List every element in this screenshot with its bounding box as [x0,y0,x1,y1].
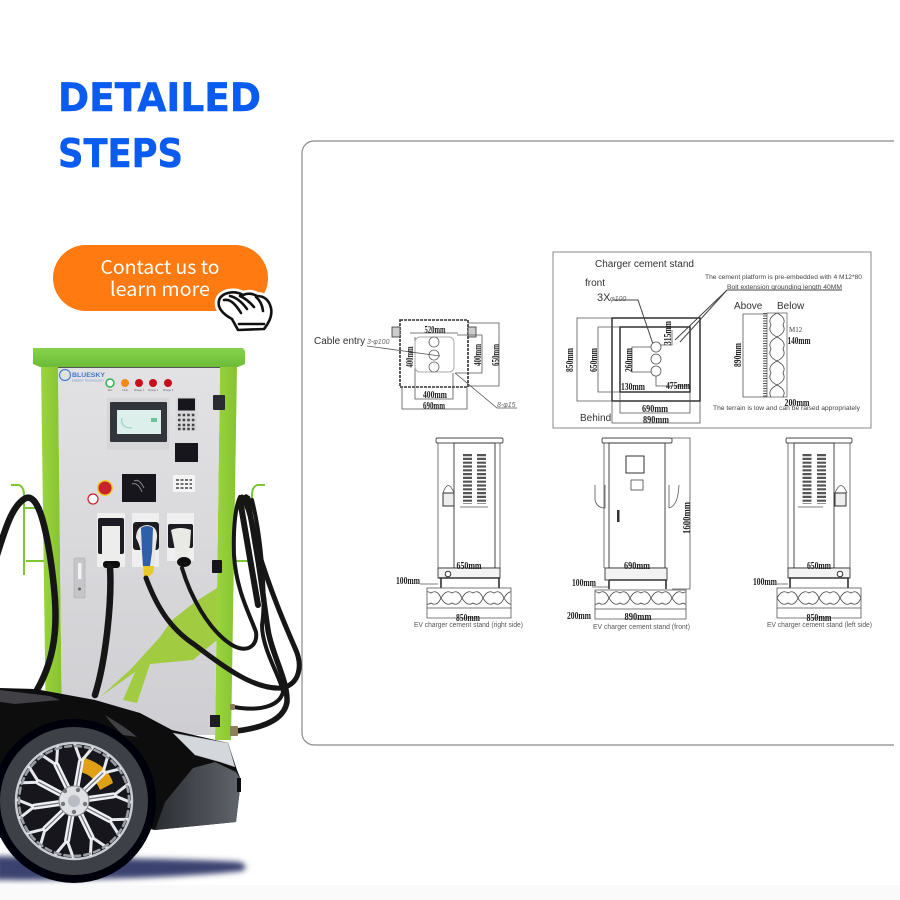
drawing: charger cement stand plan: 130mm [621,381,645,393]
indicator lights: Charge 2 [148,389,159,392]
drawing: front elevation [567,438,693,631]
keypad [176,397,197,431]
card reader [175,443,198,462]
drawing: charger cement stand plan [553,252,871,428]
car shadow [0,856,246,880]
panel: installation drawings card [302,141,894,745]
hub [59,786,89,816]
wheel arch [0,719,156,883]
hood highlight [0,690,137,737]
title: DETAILED [58,76,261,121]
warning sign [88,494,98,504]
RFID reader [122,474,156,502]
indicator lights: Charge 3 [163,389,174,392]
front bumper [155,762,241,830]
logo: BLUESKY [72,372,106,379]
drawing: cable entry plan: 8-φ15 [497,402,516,409]
charging cables [0,497,299,731]
connector recesses [97,513,194,567]
QR sticker [173,475,195,492]
emergency stop button [97,480,113,496]
drawing: charger cement stand plan: front [585,278,605,289]
drawing: cable entry plan [314,320,517,412]
drawing: cable entry plan: 520mm [424,324,446,336]
lock lower [210,715,220,727]
contact button: learn more [110,275,210,302]
title: STEPS [58,132,183,177]
drawing: cable entry plan: 400mm [423,389,447,401]
drawing: right side elevation: 850mm [456,612,480,624]
grille notch [237,778,241,792]
drawing: stand cross-section: 140mm [788,335,810,347]
logo [60,370,106,382]
drawing: charger cement stand plan: 850mm [564,348,576,372]
drawing: charger cement stand plan: 475mm [666,380,690,392]
drawing: cable entry plan: 690mm [423,400,445,412]
drawing: right side elevation: EV charger cement stand (right side) [414,622,523,629]
drawing: right side elevation: 100mm [396,575,420,587]
brake caliper [80,757,113,790]
green swoosh graphic [100,588,217,703]
drawing: right side elevation: 650mm [456,560,482,572]
drawing: charger cement stand plan: 260mm [623,348,635,372]
connector 2 [133,522,159,577]
drawing: stand cross-section: 890mm [732,343,744,367]
lock bottom [212,560,222,573]
drawing: cable entry plan: 400mm [404,346,416,368]
drawing: right side elevation [396,438,523,629]
drawing: charger cement stand plan: 690mm [642,403,668,415]
headlight [173,733,235,767]
indicator lights [106,379,174,392]
drawing: front elevation: EV charger cement stand (front) [593,624,690,631]
indicator lights: Fault [122,389,128,392]
drawing: front elevation: 890mm [624,611,652,623]
contact button: Contact us to [100,253,220,280]
drawing: charger cement stand plan: 650mm [588,348,600,372]
drawing: cable entry plan: 3-φ100 [367,339,390,346]
icon: pointing hand [219,292,271,330]
drawing: left side elevation [753,438,872,629]
logo: ENERGY TECHNOLOGY [72,378,104,382]
indicator lights: Run [108,389,113,392]
car body [0,688,241,838]
drawing: left side elevation: 100mm [753,576,777,588]
cable fittings [230,704,238,736]
illustration: EV charging station [0,348,299,740]
drawing: charger cement stand plan: Behind [580,413,611,424]
drawing: cable entry plan: 650mm [490,344,502,366]
spokes [18,745,130,857]
side handle [74,558,85,598]
drawing: stand cross-section [713,301,861,412]
connector 3 [168,524,193,567]
drawing: stand cross-section: Below [777,301,805,312]
drawing: stand cross-section: 200mm [784,397,810,409]
charger body [33,348,245,740]
charger holster hooks [11,485,265,575]
drawing: cable entry plan: 400mm [472,344,484,366]
drawing: front elevation: 100mm [572,577,596,589]
contact button [53,245,268,311]
drawing: front elevation: 690mm [624,560,650,572]
drawing: charger cement stand plan: Charger cement stand [595,259,694,270]
drawing: charger cement stand plan: 3X [597,292,611,304]
drawing: left side elevation: 650mm [807,560,831,572]
bottom fade [0,885,900,900]
touch screen [107,398,169,450]
drawing: front elevation: 200mm [567,610,591,622]
title [58,76,261,177]
indicator lights: Charge 1 [134,389,145,392]
drawing: charger cement stand plan: 315mm [662,321,674,345]
drawing: charger cement stand plan: 890mm [643,414,669,426]
drawing: charger cement stand plan: The cement platform is pre-embedded with 4 M12*80 [705,274,862,281]
drawing: cable entry plan: Cable entry [314,336,365,347]
drawing: left side elevation: 850mm [806,612,832,624]
front wheel [0,727,148,875]
drawing: charger cement stand plan: Bolt extension grounding length 40MM [727,284,842,291]
illustration: black car front [0,688,241,883]
lock top [213,395,225,410]
drawing: left side elevation: EV charger cement stand (left side) [767,622,872,629]
drawing: stand cross-section: Above [734,301,763,312]
drawing: stand cross-section: The terrain is low and can be raised appropriately [713,405,861,412]
drawing: stand cross-section: M12 [789,326,803,334]
drawing: front elevation: 1600mm [681,502,693,534]
connector 1 [98,518,124,568]
drawing: charger cement stand plan: φ100 [610,296,626,303]
